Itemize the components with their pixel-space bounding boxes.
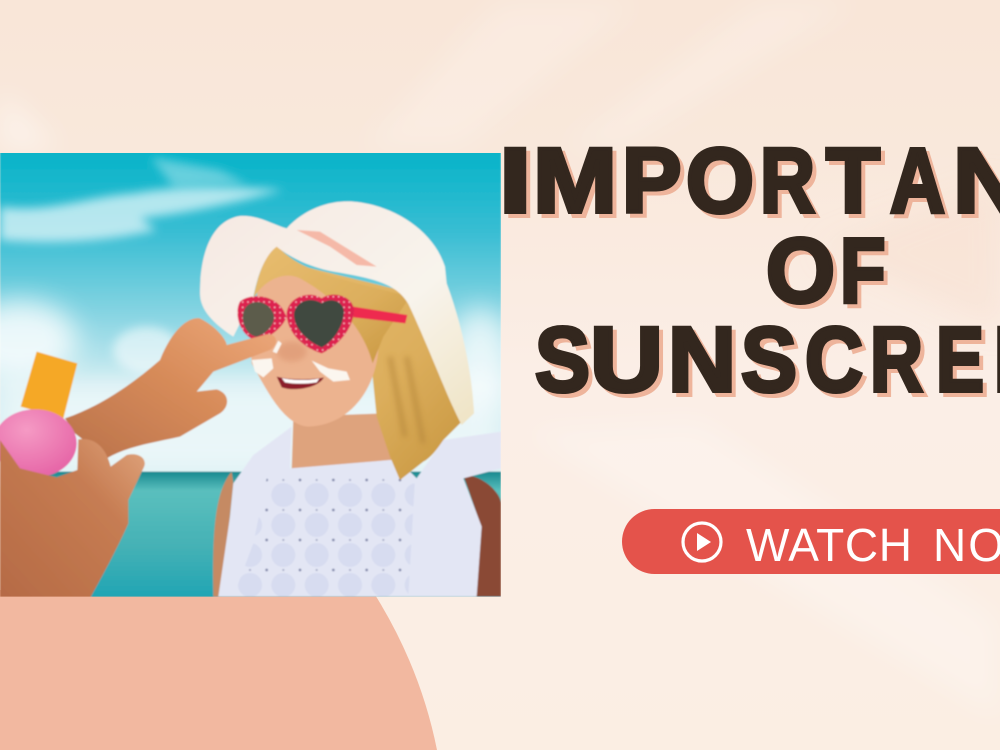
applying hand	[65, 318, 276, 458]
neck	[292, 413, 392, 470]
title line 1: A	[890, 130, 945, 232]
title line 2: O	[766, 220, 835, 322]
title	[504, 146, 1000, 398]
title line 3: U	[590, 309, 663, 411]
nose shadow	[277, 342, 307, 362]
sunscreen bottle	[0, 352, 77, 477]
girl's left arm	[213, 472, 233, 597]
title line 3: C	[805, 309, 863, 411]
title line 3: S	[535, 309, 590, 411]
clouds	[0, 157, 510, 473]
title line 1: P	[622, 130, 682, 232]
sky	[0, 150, 501, 477]
button label: WATCH	[746, 519, 926, 571]
title line 1: O	[686, 130, 754, 232]
photo: child at the beach having sunscreen applied	[0, 150, 510, 598]
sunscreen smears	[252, 341, 350, 382]
smile	[277, 377, 324, 389]
heart sunglasses	[237, 295, 407, 353]
icon: play circle	[683, 523, 721, 561]
title line 3: S	[741, 309, 797, 411]
girl's right arm	[463, 475, 501, 597]
face	[251, 263, 378, 427]
title line 1: M	[533, 130, 617, 232]
hair	[309, 267, 462, 480]
title line 1: T	[826, 130, 880, 232]
title line 1: R	[760, 130, 815, 232]
hair over forehead	[253, 245, 410, 363]
title line 2: F	[840, 220, 886, 322]
title line 3: N	[668, 309, 736, 411]
title line 3: R	[870, 309, 923, 411]
peach semicircle shape	[0, 590, 437, 750]
dress	[218, 427, 501, 597]
hat	[200, 201, 474, 425]
title line 3: E	[936, 309, 984, 411]
sea	[0, 472, 501, 598]
title line 1: I	[499, 130, 532, 232]
watch now button	[622, 509, 1000, 574]
hand holding bottle	[0, 439, 145, 598]
